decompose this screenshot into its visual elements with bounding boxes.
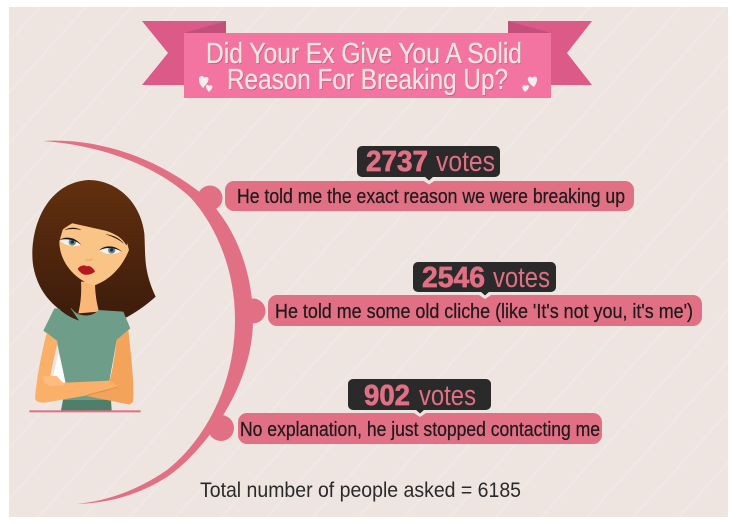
lips (78, 265, 95, 275)
arm: right and lower forearm (87, 330, 133, 405)
crescent arc with connector knobs (43, 141, 266, 504)
answer bubble (268, 295, 702, 326)
title banner (142, 21, 592, 98)
banner panel (184, 33, 551, 98)
forearm crease (87, 387, 117, 395)
knob 2 (240, 298, 266, 324)
answer bubble (225, 181, 634, 211)
answer text: He told me some old cliche (like 'It's not you, it's me') (275, 301, 693, 323)
vote count tag (413, 262, 556, 299)
eyebrows (64, 228, 124, 244)
total footer text: Total number of people asked = 6185 (200, 478, 521, 502)
vote count tag: 902 (364, 380, 410, 412)
vote count tag (348, 379, 491, 417)
neck (78, 282, 99, 313)
white gaps between arms and torso (52, 353, 118, 385)
nose (86, 259, 92, 260)
vote count tag: 2546 (422, 262, 485, 294)
knob 3 (208, 415, 234, 441)
title line 2 shadow: Reason For Breaking Up? (228, 65, 509, 97)
eye: left (59, 238, 81, 246)
ribbon tail: right (508, 21, 592, 85)
option 2: old cliche (268, 262, 702, 326)
face (59, 222, 129, 285)
vote count tag: votes (436, 146, 495, 178)
shirt (43, 308, 130, 411)
crescent (43, 141, 253, 504)
eye: right (99, 246, 122, 254)
hair bangs (55, 192, 138, 245)
hair lock over shoulder (55, 303, 79, 321)
vote count tag: 2737 (366, 146, 428, 178)
answer text: He told me the exact reason we were breaking up (237, 186, 625, 208)
ribbon fold: right (508, 21, 551, 33)
ribbon fold: left (184, 21, 226, 33)
icon: hearts left (199, 76, 212, 92)
knob 1 (198, 186, 222, 210)
title line 1: Did Your Ex Give You A Solid (206, 38, 522, 70)
vote count tag: votes (419, 380, 476, 412)
hair back (32, 180, 156, 321)
answer text: No explanation, he just stopped contacting me (240, 419, 600, 441)
vote count tag: votes (493, 262, 550, 294)
hand (43, 376, 65, 386)
icon: hearts right (522, 77, 537, 92)
title line 2: Reason For Breaking Up? (227, 64, 508, 96)
title line 1 shadow: Did Your Ex Give You A Solid (207, 39, 523, 71)
answer bubble (238, 413, 602, 444)
vote count tag (357, 146, 500, 184)
option 1: exact reason (225, 146, 634, 211)
ribbon tail: left (142, 21, 226, 85)
option 3: no explanation (238, 379, 602, 444)
table line (29, 410, 141, 412)
illustration: woman with crossed arms (29, 180, 156, 412)
arm: left and upper forearm (35, 333, 118, 403)
shirt shadow at waist (61, 400, 112, 411)
